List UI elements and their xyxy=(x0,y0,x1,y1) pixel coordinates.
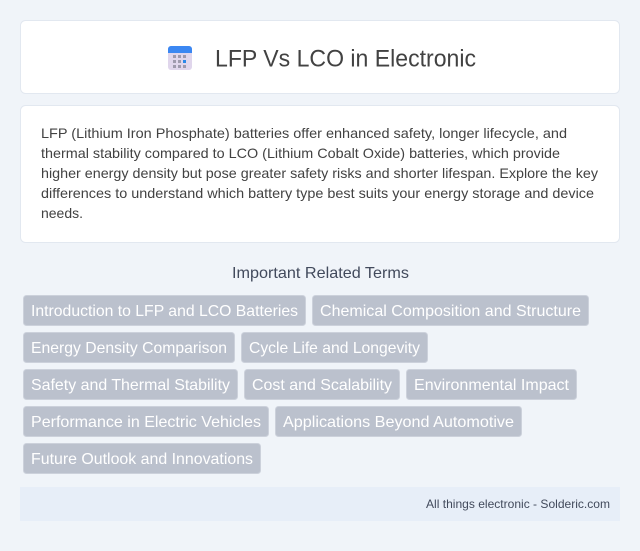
footer xyxy=(20,487,620,521)
tag: Environmental Impact xyxy=(414,377,570,394)
tag xyxy=(312,296,588,326)
tag: Applications Beyond Automotive xyxy=(283,414,514,431)
footer credit: All things electronic - Solderic.com xyxy=(426,497,610,511)
tag xyxy=(276,406,522,436)
tag: Cost and Scalability xyxy=(252,377,392,394)
tag xyxy=(406,370,576,400)
text block: description: LFP (Lithium Iron Phosphate) batteries offer enhanced safety, longer lifecycle, and xyxy=(41,125,567,141)
tag: Introduction to LFP and LCO Batteries xyxy=(31,303,298,320)
text block: description: needs. xyxy=(41,205,83,221)
panel: header xyxy=(20,20,620,94)
panel: description xyxy=(20,106,620,242)
text block: description: differences to understand which battery type best suits your energy storage and device xyxy=(41,185,594,201)
tag: Future Outlook and Innovations xyxy=(31,451,253,468)
tag xyxy=(24,370,238,400)
tag: Cycle Life and Longevity xyxy=(249,340,420,357)
tag xyxy=(24,406,268,436)
icon: calendar xyxy=(168,46,192,70)
tag xyxy=(24,332,234,362)
text block: description: higher energy density but pose greater safety risks and shorter lifespan. Explore the key xyxy=(41,165,598,181)
text block: description: thermal stability compared to LCO (Lithium Cobalt Oxide) batteries, which provide xyxy=(41,145,560,161)
tag: Energy Density Comparison xyxy=(31,340,227,357)
tag: Chemical Composition and Structure xyxy=(320,303,581,320)
title: LFP Vs LCO in Electronic xyxy=(215,46,476,72)
tag xyxy=(24,444,260,474)
tag xyxy=(24,296,306,326)
tag: Performance in Electric Vehicles xyxy=(31,414,261,431)
tag xyxy=(242,332,428,362)
tag xyxy=(244,370,400,400)
tag list xyxy=(24,296,588,474)
text block: description xyxy=(41,125,598,221)
heading: important related terms: Important Related Terms xyxy=(232,265,409,282)
tag: Safety and Thermal Stability xyxy=(31,377,230,394)
